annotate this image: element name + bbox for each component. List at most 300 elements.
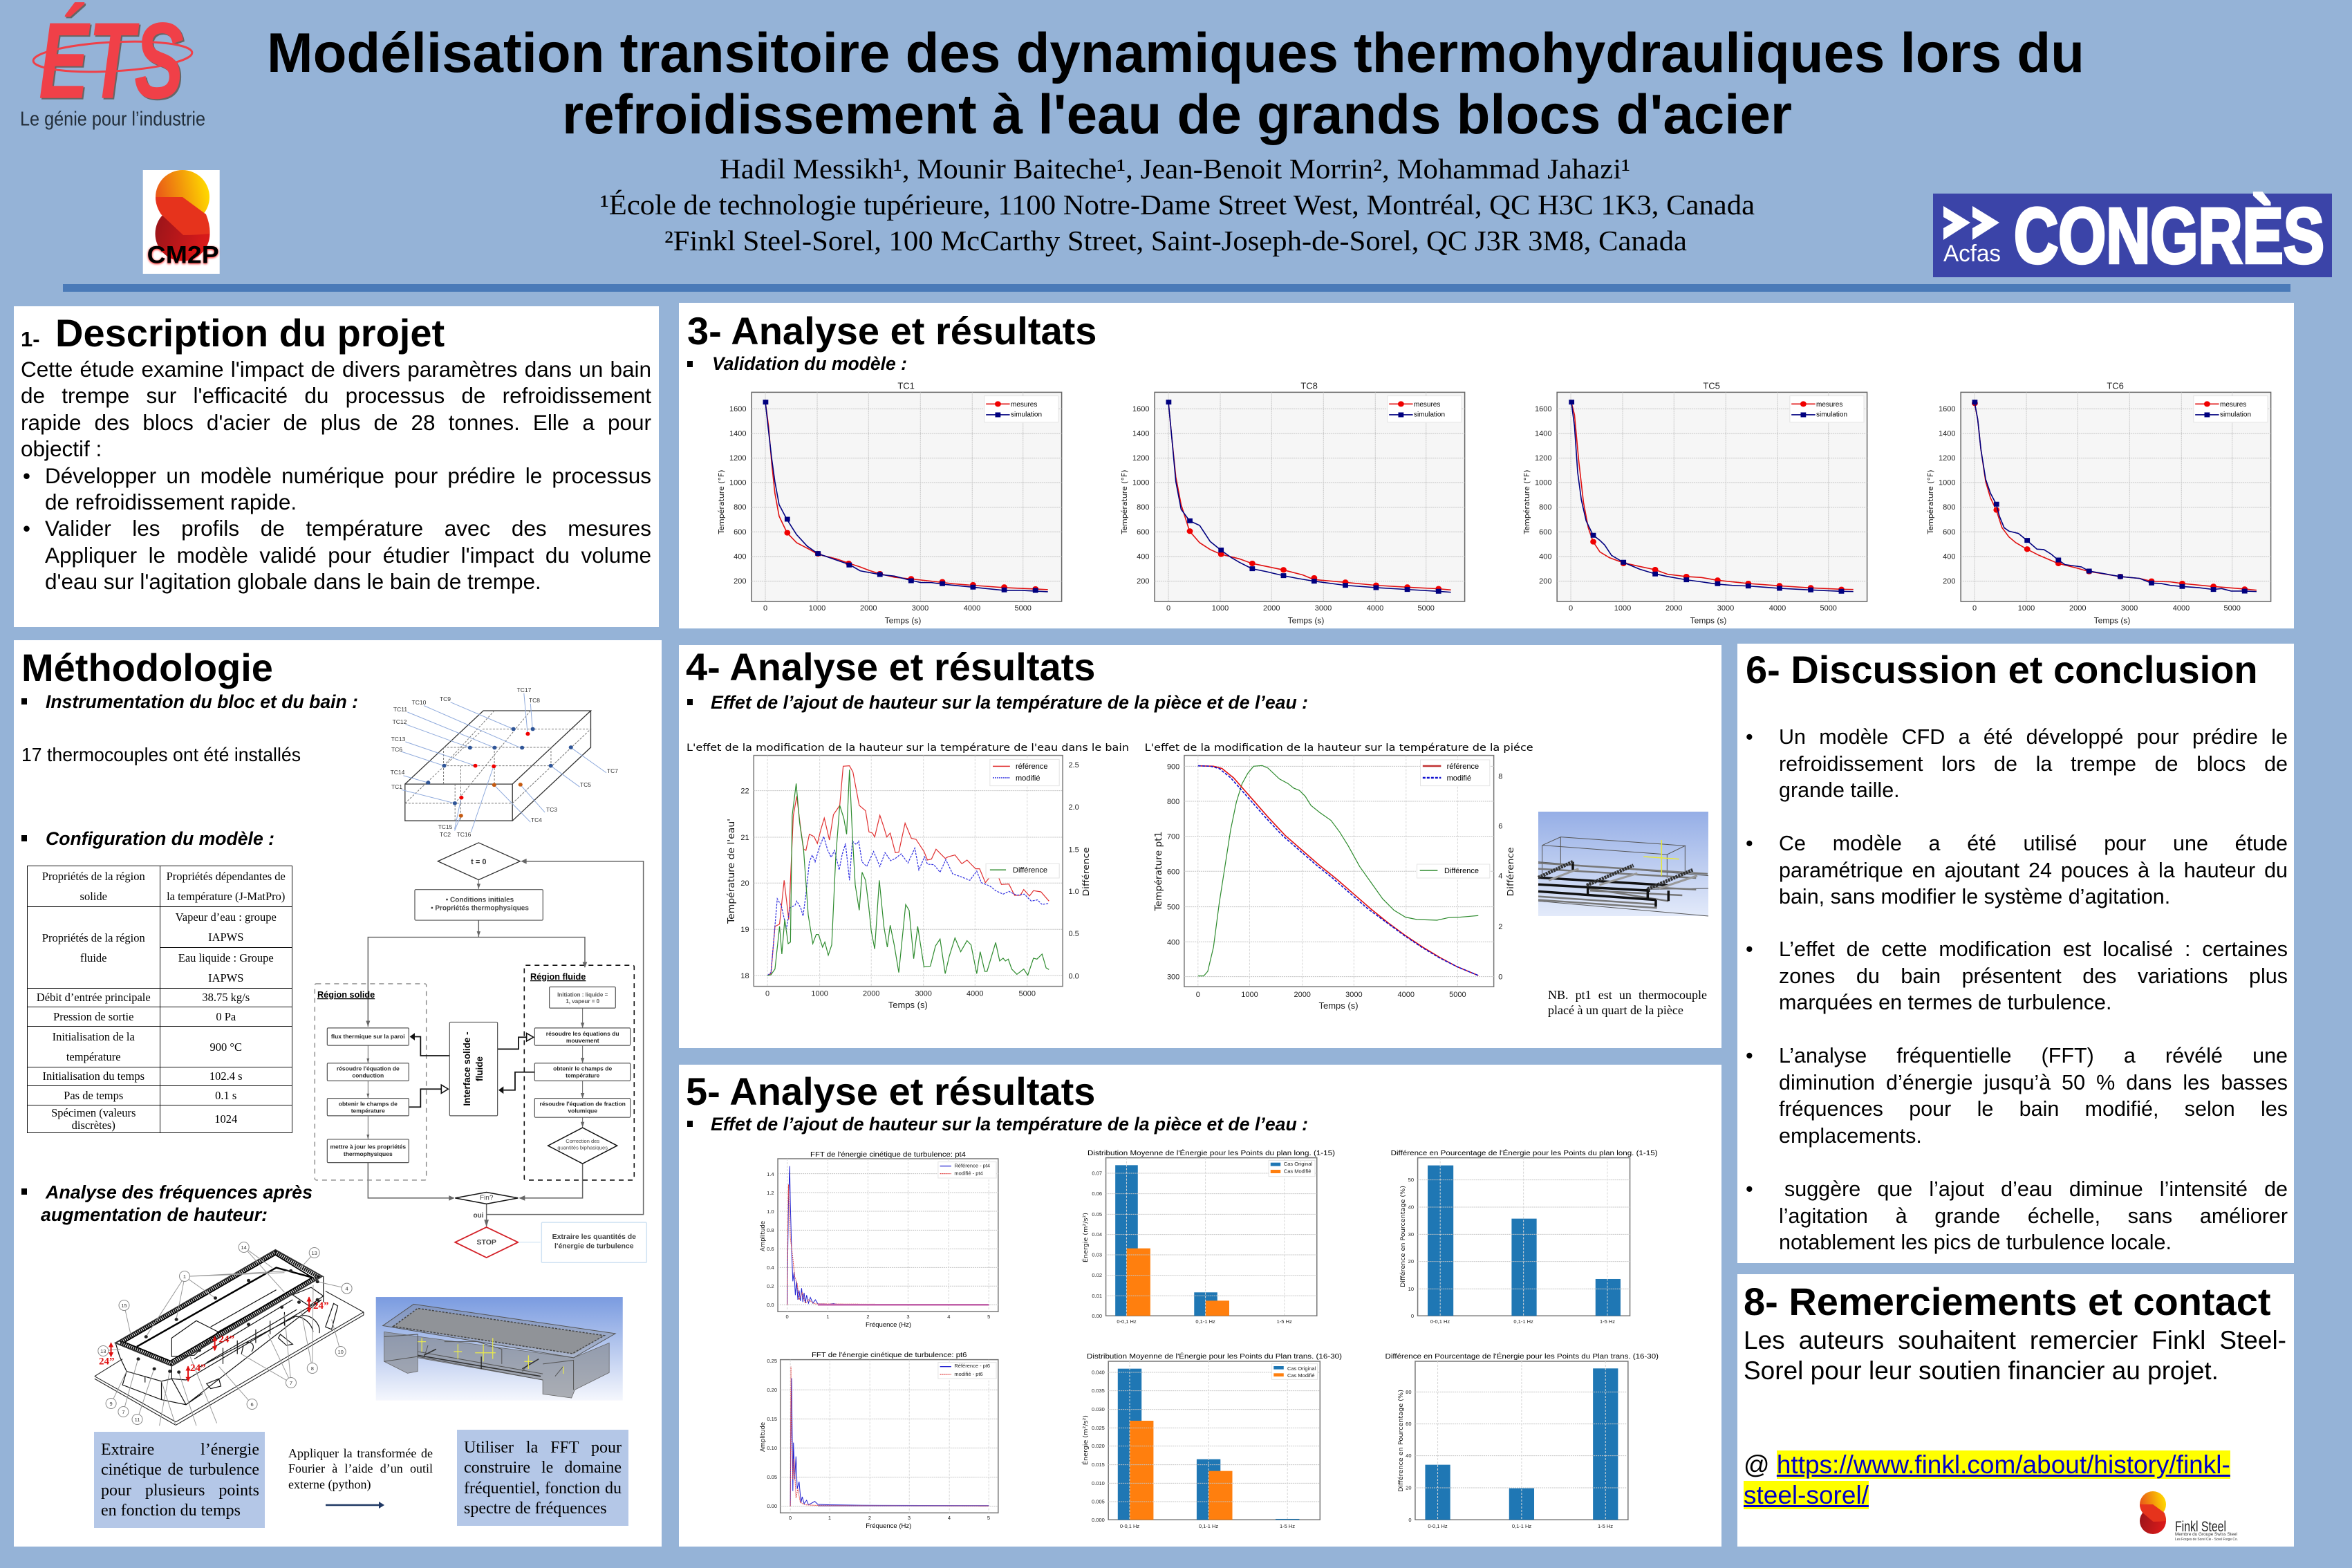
diagram: quench tank bbox=[95, 1242, 364, 1426]
text: NB pt1 bbox=[1548, 988, 1707, 1017]
text: project description: Valider les profils de température avec des mesures bbox=[45, 516, 651, 541]
chart: part temperature: 8 bbox=[1498, 772, 1502, 781]
chart: TC5: 1000 bbox=[1535, 478, 1551, 487]
chart: TC5: 1000 bbox=[1614, 604, 1631, 613]
chart: percent difference long plane: 50 bbox=[1408, 1177, 1414, 1183]
chart: TC8: 1200 bbox=[1132, 454, 1149, 463]
table: model configuration: température bbox=[66, 1050, 121, 1063]
text: contact link: @ https://www.finkl.com/about/history/finkl- bbox=[1744, 1450, 2230, 1479]
chart: TC5: mesures bbox=[1816, 401, 1842, 409]
panel: 4 effet de la hauteur bbox=[679, 645, 1721, 1048]
chart: energy distribution long plane: 0.02 bbox=[1092, 1272, 1102, 1278]
chart: FFT pt4: 0.4 bbox=[767, 1264, 774, 1271]
chart: energy distribution trans plane: 0.035 bbox=[1092, 1388, 1105, 1394]
text: project description: • bbox=[23, 516, 30, 541]
diagram: quench tank: 7 bbox=[122, 1409, 124, 1415]
chart: percent difference long plane: 40 bbox=[1408, 1204, 1414, 1210]
text: acknowledgements: Sorel pour leur soutien financier au projet. bbox=[1744, 1356, 2219, 1385]
chart: energy distribution long plane: Distribution Moyenne de l'Énergie pour les Points du plan long. (1-15) bbox=[1088, 1148, 1335, 1157]
flowchart: solver algorithm: fluide bbox=[474, 1056, 485, 1081]
chart: TC1: 1200 bbox=[729, 454, 747, 463]
chart: TC1 bbox=[717, 381, 1062, 626]
authors and affiliations: ¹École de technologie tupérieure, 1100 Notre-Dame Street West, Montréal, QC H3C 1K3, Canada bbox=[600, 189, 1755, 221]
text: appliquer transformee: Appliquer la transformée de bbox=[288, 1446, 433, 1460]
diagram: quench tank: 11 bbox=[135, 1417, 140, 1423]
text: project description bbox=[21, 357, 651, 594]
text: extraire energie: en fonction du temps bbox=[101, 1502, 241, 1520]
chart: TC5: 600 bbox=[1539, 528, 1551, 536]
chart: percent difference long plane: Différence en Pourcentage de l'Énergie pour les Points du plan long. (1-15) bbox=[1391, 1148, 1658, 1157]
table: model configuration: Propriétés de la région bbox=[42, 870, 145, 883]
chart: TC1: 5000 bbox=[1014, 604, 1032, 613]
subheading: instrumentation: Instrumentation du bloc et du bain : bbox=[46, 691, 358, 712]
chart: TC1: 0 bbox=[763, 604, 767, 613]
subheading: configuration: Configuration du modèle : bbox=[46, 828, 274, 849]
chart: TC5: 4000 bbox=[1769, 604, 1786, 613]
chart: TC6: 3000 bbox=[2121, 604, 2138, 613]
diagram: thermocouple block: TC3 bbox=[546, 806, 557, 813]
heading: analyse et resultats 5: 5- Analyse et résultats bbox=[686, 1070, 1095, 1113]
chart: TC6: Température (°F) bbox=[1926, 470, 1935, 534]
chart: TC5: 3000 bbox=[1717, 604, 1734, 613]
chart: percent difference trans plane bbox=[1385, 1352, 1659, 1529]
chart: TC6 bbox=[1926, 381, 2271, 626]
diagram: quench tank: 24” bbox=[190, 1363, 206, 1374]
panel: methodologie bbox=[14, 640, 662, 1547]
authors and affiliations: Hadil Messikh¹, Mounir Baiteche¹, Jean-Benoit Morrin², Mohammad Jahazi¹ bbox=[720, 153, 1630, 185]
chart: energy distribution trans plane: Cas Modifié bbox=[1287, 1372, 1315, 1379]
chart: part temperature: 4 bbox=[1498, 872, 1502, 881]
diagram: thermocouple block: TC1 bbox=[391, 783, 402, 790]
diagram: quench tank: 10 bbox=[338, 1349, 344, 1355]
chart: TC8: TC8 bbox=[1300, 381, 1318, 391]
chart: TC6: 800 bbox=[1943, 503, 1955, 512]
chart: FFT pt6: Amplitude bbox=[760, 1422, 767, 1452]
chart: FFT pt4 bbox=[760, 1151, 998, 1329]
chart: TC1: 400 bbox=[734, 553, 747, 561]
chart: FFT pt6: 5 bbox=[987, 1515, 990, 1521]
logo: CM2P: CM2P bbox=[147, 242, 219, 269]
diagram: quench tank: 24” bbox=[313, 1300, 329, 1312]
logo: Finkl Steel: Membre du Groupe Swiss Steel bbox=[2175, 1533, 2237, 1537]
table: model configuration: Débit d’entrée principale bbox=[37, 991, 151, 1004]
chart: TC8 bbox=[1120, 381, 1465, 626]
chart: percent difference trans plane: 0,1-1 Hz bbox=[1512, 1523, 1531, 1529]
text: conclusion bullet 2: Ce modèle a été utilisé pour une étude bbox=[1779, 832, 2288, 855]
title: refroidissement à l'eau de grands blocs d'acier bbox=[562, 84, 1792, 146]
chart: percent difference long plane: 0 bbox=[1411, 1313, 1414, 1319]
heading: analyse et resultats 4: 4- Analyse et résultats bbox=[686, 645, 1095, 689]
title: Modélisation transitoire des dynamiques thermohydrauliques lors du bbox=[267, 22, 2084, 84]
text: utiliser FFT: spectre de fréquences bbox=[464, 1500, 607, 1518]
text: contact link bbox=[1744, 1450, 2230, 1509]
flowchart: solver algorithm: résoudre l'équation de bbox=[337, 1065, 400, 1072]
chart: TC6: 0 bbox=[1972, 604, 1977, 613]
chart: energy distribution trans plane bbox=[1081, 1352, 1342, 1529]
flowchart: solver algorithm: Interface solide - bbox=[462, 1032, 472, 1106]
chart: percent difference trans plane: 0 bbox=[1408, 1517, 1412, 1523]
chart: TC6: 1600 bbox=[1939, 405, 1955, 413]
chart: FFT pt4: FFT de l'énergie cinétique de turbulence: pt4 bbox=[810, 1151, 966, 1159]
chart: TC5: 200 bbox=[1539, 577, 1551, 586]
logo: Finkl Steel: Finkl Steel bbox=[2175, 1519, 2226, 1535]
table: model configuration: Pression de sortie bbox=[53, 1009, 133, 1023]
text: conclusion bullet 1: Un modèle CFD a été développé pour prédire le bbox=[1779, 725, 2288, 749]
chart: water temperature: 21 bbox=[740, 834, 749, 842]
text: conclusion bullet 3 bbox=[1746, 937, 2288, 1014]
chart: percent difference trans plane: Différence en Pourcentage de l'Énergie pour les Points du Plan trans. (16-30) bbox=[1385, 1352, 1659, 1361]
chart: water temperature: 0 bbox=[765, 990, 769, 998]
subheading: analyse des frequences bbox=[21, 1182, 312, 1225]
chart: TC1: 600 bbox=[734, 528, 747, 536]
flowchart: solver algorithm: • Propriétés thermophysiques bbox=[431, 904, 529, 913]
diagram: thermocouple block: TC14 bbox=[391, 769, 405, 776]
text: appliquer transformee bbox=[288, 1446, 433, 1491]
chart: energy distribution long plane bbox=[1081, 1148, 1335, 1325]
flowchart: solver algorithm: oui bbox=[473, 1212, 484, 1220]
chart: part temperature: L'effet de la modification de la hauteur sur la température de la piéce bbox=[1145, 743, 1533, 754]
table: model configuration: Initialisation du temps bbox=[42, 1070, 144, 1083]
text: utiliser FFT: Utiliser la FFT pour bbox=[464, 1439, 622, 1457]
chart: TC5: 0 bbox=[1569, 604, 1573, 613]
chart: TC8: 200 bbox=[1137, 577, 1149, 586]
text: conclusion bullet 4 bbox=[1746, 1044, 2288, 1148]
authors and affiliations: ²Finkl Steel-Sorel, 100 McCarthy Street, Saint-Joseph-de-Sorel, QC J3R 3M8, Canada bbox=[664, 225, 1687, 256]
chart: part temperature: 400 bbox=[1167, 938, 1179, 946]
text: conclusion bullet 4: L’analyse fréquentielle (FFT) a révélé une bbox=[1779, 1044, 2288, 1067]
chart: water temperature: Différence bbox=[1081, 848, 1091, 896]
chart: energy distribution long plane: Énergie (m²/s²) bbox=[1081, 1213, 1090, 1262]
chart: water temperature bbox=[687, 743, 1129, 1010]
chart: FFT pt6: 0.10 bbox=[767, 1445, 777, 1451]
chart: part temperature: 3000 bbox=[1345, 991, 1363, 999]
chart: percent difference trans plane: 40 bbox=[1406, 1453, 1412, 1459]
flowchart: solver algorithm: Initiation : liquide = bbox=[557, 991, 608, 998]
flowchart: solver algorithm: obtenir le champs de bbox=[339, 1100, 398, 1107]
chart: FFT pt4: 0.0 bbox=[767, 1302, 774, 1308]
text: acknowledgements: Les auteurs souhaitent remercier Finkl Steel- bbox=[1744, 1326, 2286, 1354]
chart: TC5: 800 bbox=[1539, 503, 1551, 512]
chart: water temperature: L'effet de la modification de la hauteur sur la température de l'eau dans le bain bbox=[687, 743, 1129, 754]
chart: TC1: 1400 bbox=[729, 430, 747, 438]
chart: energy distribution trans plane: Cas Original bbox=[1287, 1365, 1316, 1372]
text: conclusion bullet 5: l’agitation à grande échelle, sans améliorer bbox=[1779, 1204, 2288, 1228]
chart: energy distribution long plane: 1-5 Hz bbox=[1277, 1318, 1292, 1325]
table: model configuration: discrètes) bbox=[72, 1119, 115, 1131]
chart: FFT pt4: 5 bbox=[987, 1314, 990, 1320]
flowchart: solver algorithm: Fin? bbox=[480, 1195, 494, 1202]
text box: extraire energie bbox=[94, 1432, 265, 1528]
chart: TC8: Température (°F) bbox=[1120, 470, 1129, 534]
chart: TC1: 200 bbox=[734, 577, 747, 586]
chart: energy distribution long plane: Cas Modifié bbox=[1284, 1168, 1311, 1174]
flowchart: solver algorithm: résoudre l'équation de fraction bbox=[540, 1100, 626, 1107]
subheading: analyse des frequences: augmentation de hauteur: bbox=[41, 1204, 268, 1225]
chart: FFT pt4: 2 bbox=[866, 1314, 870, 1320]
chart: water temperature: 2000 bbox=[863, 990, 879, 998]
text: extraire energie: Extraire l’énergie bbox=[101, 1441, 259, 1459]
table: model configuration: 0.1 s bbox=[215, 1088, 236, 1102]
heading: description du projet: 1- bbox=[21, 327, 40, 351]
chart: water temperature: 19 bbox=[740, 926, 749, 934]
diagram: quench tank: 1 bbox=[183, 1273, 186, 1280]
chart: FFT pt6: 0.20 bbox=[767, 1387, 777, 1393]
chart: TC5: 400 bbox=[1539, 553, 1551, 561]
diagram: thermocouple block: TC15 bbox=[438, 823, 453, 830]
diagram: quench tank: 15 bbox=[121, 1303, 127, 1309]
text: utiliser FFT: construire le domaine bbox=[464, 1459, 622, 1477]
chart: water temperature: 1.5 bbox=[1069, 846, 1079, 854]
text: project description: d'eau sur l'agitation globale dans le bain de trempe. bbox=[45, 569, 541, 594]
text: conclusion bullet 4: emplacements. bbox=[1779, 1124, 1922, 1148]
chart: percent difference trans plane: 80 bbox=[1406, 1389, 1412, 1395]
chart: TC6: 1000 bbox=[2018, 604, 2035, 613]
chart: percent difference long plane: 0-0,1 Hz bbox=[1430, 1318, 1450, 1325]
chart: TC8: 400 bbox=[1137, 553, 1149, 561]
text: extraire energie: cinétique de turbulence bbox=[101, 1461, 259, 1479]
panel: 6 discussion et conclusion: • bbox=[1746, 832, 1753, 855]
table: model configuration: 1024 bbox=[214, 1112, 237, 1126]
text: conclusion bullet 2: bain, sans modifier le système d’agitation. bbox=[1779, 885, 2170, 908]
diagram: quench tank: 8 bbox=[311, 1365, 314, 1372]
table: model configuration: IAPWS bbox=[208, 931, 243, 944]
flowchart: solver algorithm: Région fluide bbox=[530, 972, 586, 982]
chart: part temperature: modifié bbox=[1447, 774, 1471, 783]
chart: FFT pt4: Amplitude bbox=[760, 1221, 767, 1251]
chart: part temperature: Différence bbox=[1444, 867, 1479, 875]
text: NB pt1: placé à un quart de la pièce bbox=[1548, 1003, 1683, 1017]
chart: TC6: 600 bbox=[1943, 528, 1955, 536]
chart: part temperature: 300 bbox=[1167, 973, 1179, 982]
chart: energy distribution trans plane: 0.040 bbox=[1092, 1369, 1105, 1376]
chart: part temperature: 2000 bbox=[1294, 991, 1311, 999]
flowchart: solver algorithm: STOP bbox=[476, 1238, 496, 1247]
diagram: thermocouple block: TC2 bbox=[440, 831, 451, 838]
diagram: quench tank: 6 bbox=[251, 1401, 254, 1408]
chart: part temperature: 2 bbox=[1498, 923, 1502, 931]
chart: part temperature: 800 bbox=[1167, 798, 1179, 806]
chart: energy distribution long plane: 0.07 bbox=[1092, 1170, 1102, 1177]
text: project description: objectif : bbox=[21, 436, 102, 461]
flowchart: solver algorithm: l'énergie de turbulence bbox=[554, 1242, 634, 1251]
diagram: thermocouple block: TC10 bbox=[412, 699, 427, 706]
chart: TC1: 3000 bbox=[912, 604, 928, 613]
chart: water temperature: 1000 bbox=[811, 990, 828, 998]
text: conclusion bullet 1: grande taille. bbox=[1779, 778, 1900, 802]
text: project description: Cette étude examine l'impact de divers paramètres dans un bain bbox=[21, 357, 651, 382]
chart: energy distribution long plane: 0.03 bbox=[1092, 1251, 1102, 1258]
chart: TC5: Température (°F) bbox=[1522, 470, 1531, 534]
table: model configuration: 0 Pa bbox=[216, 1009, 236, 1023]
text: project description: • bbox=[23, 463, 30, 488]
chart: part temperature: 900 bbox=[1167, 763, 1179, 771]
title bbox=[267, 22, 2084, 146]
diagram: quench tank: 13 bbox=[312, 1250, 317, 1256]
chart: energy distribution trans plane: 1-5 Hz bbox=[1280, 1523, 1295, 1529]
diagram: thermocouple block: TC4 bbox=[531, 816, 542, 823]
chart: TC6: mesures bbox=[2220, 401, 2246, 409]
logo: Finkl Steel: Les Forges de Sorel Cie - Sorel Forge Co. bbox=[2175, 1538, 2238, 1542]
chart: TC6: 1000 bbox=[1939, 478, 1955, 487]
subheading: effet hauteur 4: Effet de l’ajout de hauteur sur la température de la pièce et de l’eau : bbox=[711, 692, 1308, 713]
chart: part temperature: 0 bbox=[1498, 973, 1502, 982]
chart: percent difference long plane: 20 bbox=[1408, 1258, 1414, 1264]
chart: TC8: mesures bbox=[1414, 401, 1440, 409]
chart: FFT pt4: 1.4 bbox=[767, 1171, 774, 1177]
text: utiliser FFT bbox=[464, 1439, 622, 1518]
panel: 6 discussion et conclusion: • bbox=[1746, 1177, 1753, 1201]
chart: water temperature: 4000 bbox=[967, 990, 984, 998]
chart: water temperature: Température de l'eau' bbox=[727, 819, 737, 924]
table: model configuration: Eau liquide : Groupe bbox=[178, 951, 274, 964]
chart: TC5: TC5 bbox=[1703, 381, 1720, 391]
diagram: thermocouple block: TC6 bbox=[391, 746, 402, 753]
text: extraire energie: pour plusieurs points bbox=[101, 1482, 259, 1500]
chart: part temperature bbox=[1145, 743, 1533, 1011]
text: conclusion bullet 1 bbox=[1746, 725, 2288, 802]
chart: energy distribution long plane: 0,1-1 Hz bbox=[1195, 1318, 1215, 1325]
chart: TC8: simulation bbox=[1414, 411, 1445, 419]
chart: TC8: Temps (s) bbox=[1288, 616, 1324, 626]
chart: water temperature: 3000 bbox=[915, 990, 932, 998]
arrow: to FFT box bbox=[326, 1502, 384, 1509]
table: model configuration: 900 °C bbox=[210, 1040, 242, 1054]
chart: water temperature: 2.5 bbox=[1069, 761, 1079, 769]
text: acknowledgements bbox=[1744, 1326, 2286, 1385]
chart: percent difference trans plane: Différence en Pourcentage (%) bbox=[1397, 1390, 1405, 1492]
chart: TC1: Température (°F) bbox=[717, 470, 726, 534]
flowchart: solver algorithm: Extraire les quantités de bbox=[552, 1233, 636, 1241]
flowchart: solver algorithm: flux thermique sur la paroi bbox=[331, 1033, 405, 1040]
chart: TC1: 4000 bbox=[964, 604, 980, 613]
text box: utiliser FFT bbox=[457, 1430, 628, 1526]
chart: water temperature: Temps (s) bbox=[888, 1000, 928, 1010]
chart: FFT pt6: 0.25 bbox=[767, 1358, 777, 1364]
text: contact link: steel-sorel/ bbox=[1744, 1481, 1869, 1509]
text: project description: Appliquer le modèle validé pour étudier l'impact du volume bbox=[45, 543, 651, 568]
diagram: thermocouple block: TC12 bbox=[393, 718, 407, 725]
chart: part temperature: 6 bbox=[1498, 822, 1502, 830]
chart: TC8: 1600 bbox=[1132, 405, 1149, 413]
panel: 1 description du projet bbox=[14, 306, 659, 627]
chart: energy distribution long plane: 0.05 bbox=[1092, 1211, 1102, 1217]
chart: FFT pt4: 1.2 bbox=[767, 1190, 774, 1196]
chart: energy distribution trans plane: 0.010 bbox=[1092, 1480, 1105, 1486]
table: model configuration: solide bbox=[80, 890, 107, 903]
chart: FFT pt4: 0.6 bbox=[767, 1246, 774, 1252]
diagram: quench tank: 9 bbox=[110, 1401, 113, 1407]
chart: FFT pt6: 3 bbox=[908, 1515, 911, 1521]
chart: water temperature: 22 bbox=[740, 787, 749, 796]
table: model configuration: Vapeur d’eau : groupe bbox=[176, 911, 277, 924]
chart: percent difference long plane: 10 bbox=[1408, 1286, 1414, 1292]
flowchart: solver algorithm: mouvement bbox=[566, 1037, 599, 1044]
text: conclusion bullet 3: marquées en termes de turbulence. bbox=[1779, 991, 2111, 1014]
table: model configuration: Propriétés de la région bbox=[42, 931, 145, 944]
text: thermocouples: 17 thermocouples ont été installés bbox=[21, 744, 301, 765]
flowchart: solver algorithm bbox=[315, 843, 646, 1262]
chart: TC6: 200 bbox=[1943, 577, 1955, 586]
chart: TC8: 1000 bbox=[1132, 478, 1149, 487]
diagram: quench tank: 4 bbox=[346, 1286, 348, 1292]
diagram: quench tank: 24” bbox=[218, 1334, 234, 1345]
chart: TC5: Temps (s) bbox=[1690, 616, 1726, 626]
heading: analyse et resultats 3: 3- Analyse et résultats bbox=[687, 309, 1096, 353]
chart: TC5 bbox=[1522, 381, 1867, 626]
subheading: validation du modele: Validation du modèle : bbox=[712, 353, 907, 374]
chart: FFT pt4: Référence - pt4 bbox=[954, 1162, 990, 1168]
chart: water temperature: 1.0 bbox=[1069, 888, 1079, 896]
heading: methodologie: Méthodologie bbox=[21, 646, 273, 689]
flowchart: solver algorithm: température bbox=[351, 1107, 385, 1114]
diagram: thermocouple block: TC8 bbox=[529, 697, 540, 704]
chart: TC8: 5000 bbox=[1417, 604, 1435, 613]
panel: 6 discussion et conclusion: • bbox=[1746, 725, 1753, 749]
panel: 3 validation du modele bbox=[679, 303, 2294, 628]
chart: TC1: 1600 bbox=[729, 405, 747, 413]
chart: percent difference long plane bbox=[1391, 1148, 1658, 1325]
authors and affiliations bbox=[600, 153, 1755, 256]
diagram: thermocouple block: TC17 bbox=[517, 687, 532, 693]
chart: TC6: 1400 bbox=[1939, 430, 1955, 438]
chart: energy distribution trans plane: Distribution Moyenne de l'Énergie pour les Points du Plan trans. (16-30) bbox=[1087, 1352, 1342, 1361]
chart: TC5: 1400 bbox=[1535, 430, 1551, 438]
flowchart: solver algorithm: mettre à jour les propriétés bbox=[330, 1144, 406, 1150]
flowchart: solver algorithm: obtenir le champs de bbox=[553, 1065, 612, 1072]
chart: TC5: simulation bbox=[1816, 411, 1847, 419]
diagram: quench tank: 7 bbox=[290, 1380, 292, 1386]
table: model configuration: la température (J-MatPro) bbox=[167, 890, 285, 903]
chart: percent difference long plane: 30 bbox=[1408, 1231, 1414, 1238]
chart: part temperature: 700 bbox=[1167, 833, 1179, 841]
text: conclusion bullet 2: paramétrique en ajoutant 24 pouces à la hauteur du bbox=[1779, 859, 2288, 882]
table: model configuration: 38.75 kg/s bbox=[202, 991, 250, 1004]
flowchart: solver algorithm: thermophysiques bbox=[344, 1150, 393, 1157]
panel: 8 remerciements et contact bbox=[1737, 1274, 2294, 1547]
diagram: quench tank: 14 bbox=[241, 1244, 247, 1251]
chart: TC6: 400 bbox=[1943, 553, 1955, 561]
text: project description: rapide des blocs d'acier de plus de 28 tonnes. Elle a pour bbox=[21, 410, 651, 435]
table: model configuration: fluide bbox=[80, 951, 106, 964]
chart: part temperature: Température pt1 bbox=[1154, 832, 1164, 912]
subheading: analyse des frequences: Analyse des fréquences après bbox=[45, 1182, 312, 1203]
chart: TC5: 5000 bbox=[1820, 604, 1837, 613]
chart: part temperature: 4000 bbox=[1398, 991, 1415, 999]
chart: energy distribution long plane: Cas Original bbox=[1284, 1161, 1312, 1167]
chart: part temperature: Différence bbox=[1506, 848, 1515, 896]
diagram: quench tank: 13 bbox=[100, 1348, 106, 1354]
chart: FFT pt4: 0.8 bbox=[767, 1227, 774, 1233]
text: appliquer transformee: Fourier à l’aide d’un outil bbox=[288, 1462, 433, 1475]
chart: part temperature: 500 bbox=[1167, 904, 1179, 912]
chart: part temperature: 5000 bbox=[1449, 991, 1466, 999]
chart: FFT pt4: 3 bbox=[906, 1314, 909, 1320]
chart: TC8: 0 bbox=[1166, 604, 1170, 613]
text: project description: de trempe sur l'efficacité du processus de refroidissement bbox=[21, 383, 651, 408]
text: appliquer transformee: externe (python) bbox=[288, 1477, 371, 1491]
panel: 6 discussion et conclusion: • bbox=[1746, 937, 1753, 961]
flowchart: solver algorithm: Correction des bbox=[566, 1138, 599, 1144]
chart: TC8: 800 bbox=[1137, 503, 1149, 512]
text: conclusion bullet 5: notablement les pics de turbulence locale. bbox=[1779, 1231, 2172, 1254]
table: model configuration: IAPWS bbox=[208, 971, 243, 984]
chart: energy distribution trans plane: 0,1-1 Hz bbox=[1199, 1523, 1218, 1529]
chart: TC6: 5000 bbox=[2223, 604, 2241, 613]
chart: energy distribution trans plane: 0.015 bbox=[1092, 1462, 1105, 1468]
text: project description: Développer un modèle numérique pour prédire le processus bbox=[45, 463, 651, 488]
diagram: thermocouple block bbox=[391, 687, 618, 838]
chart: energy distribution long plane: 0-0,1 Hz bbox=[1117, 1318, 1137, 1325]
